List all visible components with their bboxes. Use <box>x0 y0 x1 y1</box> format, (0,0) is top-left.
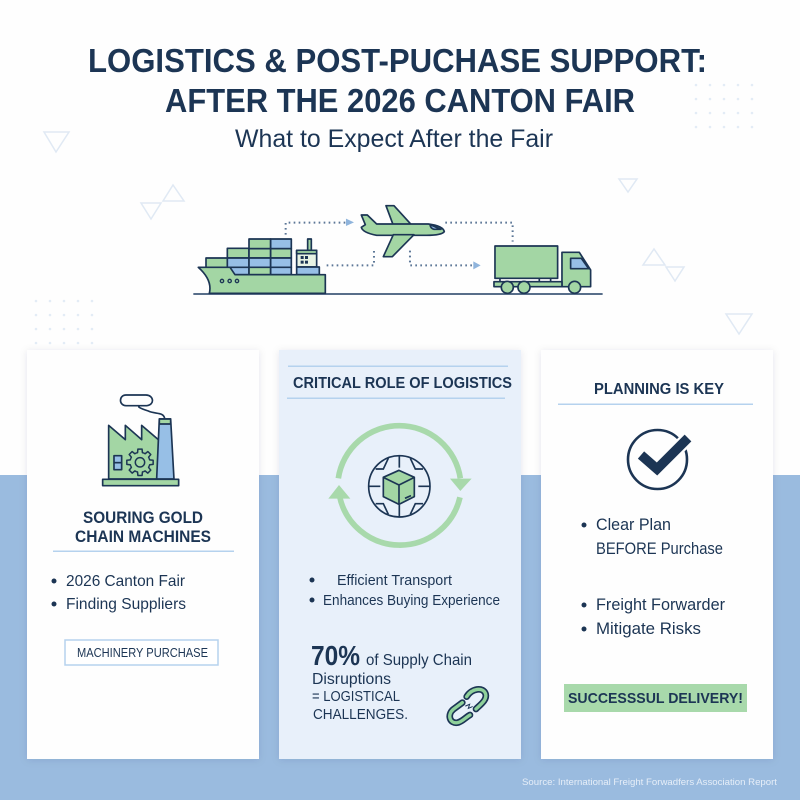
panel: critical role of logistics <box>279 350 521 759</box>
heading <box>75 509 211 546</box>
callout: successful delivery <box>564 684 747 712</box>
title: LOGISTICS & POST-PUCHASE SUPPORT: <box>88 42 707 79</box>
bullet list <box>52 573 186 613</box>
heading: SOURING GOLD <box>83 509 203 527</box>
heading: CRITICAL ROLE OF LOGISTICS <box>293 375 512 392</box>
icon: broken chain link <box>450 689 486 723</box>
bullet list: Enhances Buying Experience <box>323 592 500 609</box>
callout: machinery purchase: MACHINERY PURCHASE <box>77 646 208 660</box>
bullet list: Clear Plan <box>596 516 671 534</box>
statistic callout: = LOGISTICAL <box>312 688 400 705</box>
callout: machinery purchase <box>65 640 218 665</box>
statistic callout: of Supply Chain <box>366 652 472 669</box>
icon: globe, box, cycle arrows <box>328 426 472 545</box>
bullet list: Mitigate Risks <box>596 620 701 638</box>
icon: factory <box>103 395 179 486</box>
icon: truck <box>494 246 591 293</box>
statistic callout: CHALLENGES. <box>313 706 408 723</box>
bullet list <box>310 572 500 609</box>
transport illustration <box>193 206 603 294</box>
decorative triangles and dots <box>44 132 752 334</box>
title <box>88 42 707 119</box>
bullet list <box>582 516 725 638</box>
panel: sourcing <box>27 350 259 759</box>
icon: check mark <box>628 430 688 489</box>
subtitle: What to Expect After the Fair <box>235 125 553 153</box>
bullet list: 2026 Canton Fair <box>66 573 186 590</box>
statistic callout: Disruptions <box>312 671 391 688</box>
bullet list: Freight Forwarder <box>596 596 725 614</box>
bullet list: Efficient Transport <box>337 572 453 589</box>
statistic callout <box>311 640 472 723</box>
statistic callout: 70% <box>311 640 360 671</box>
dotted route arrows <box>286 219 513 269</box>
heading: CHAIN MACHINES <box>75 528 211 546</box>
icon: cargo ship <box>198 239 325 293</box>
source note: Source: International Freight Forwadfers Association Report <box>522 777 777 788</box>
callout: successful delivery: SUCCESSSUL DELIVERY! <box>568 690 743 707</box>
bullet list: Finding Suppliers <box>66 596 186 613</box>
heading: PLANNING IS KEY <box>594 381 724 398</box>
panel: planning is key <box>541 350 773 759</box>
blue lower background <box>0 475 800 800</box>
bullet list: BEFORE Purchase <box>596 540 723 558</box>
title: AFTER THE 2026 CANTON FAIR <box>165 82 635 119</box>
icon: airplane <box>361 206 444 257</box>
ground line <box>193 291 603 296</box>
